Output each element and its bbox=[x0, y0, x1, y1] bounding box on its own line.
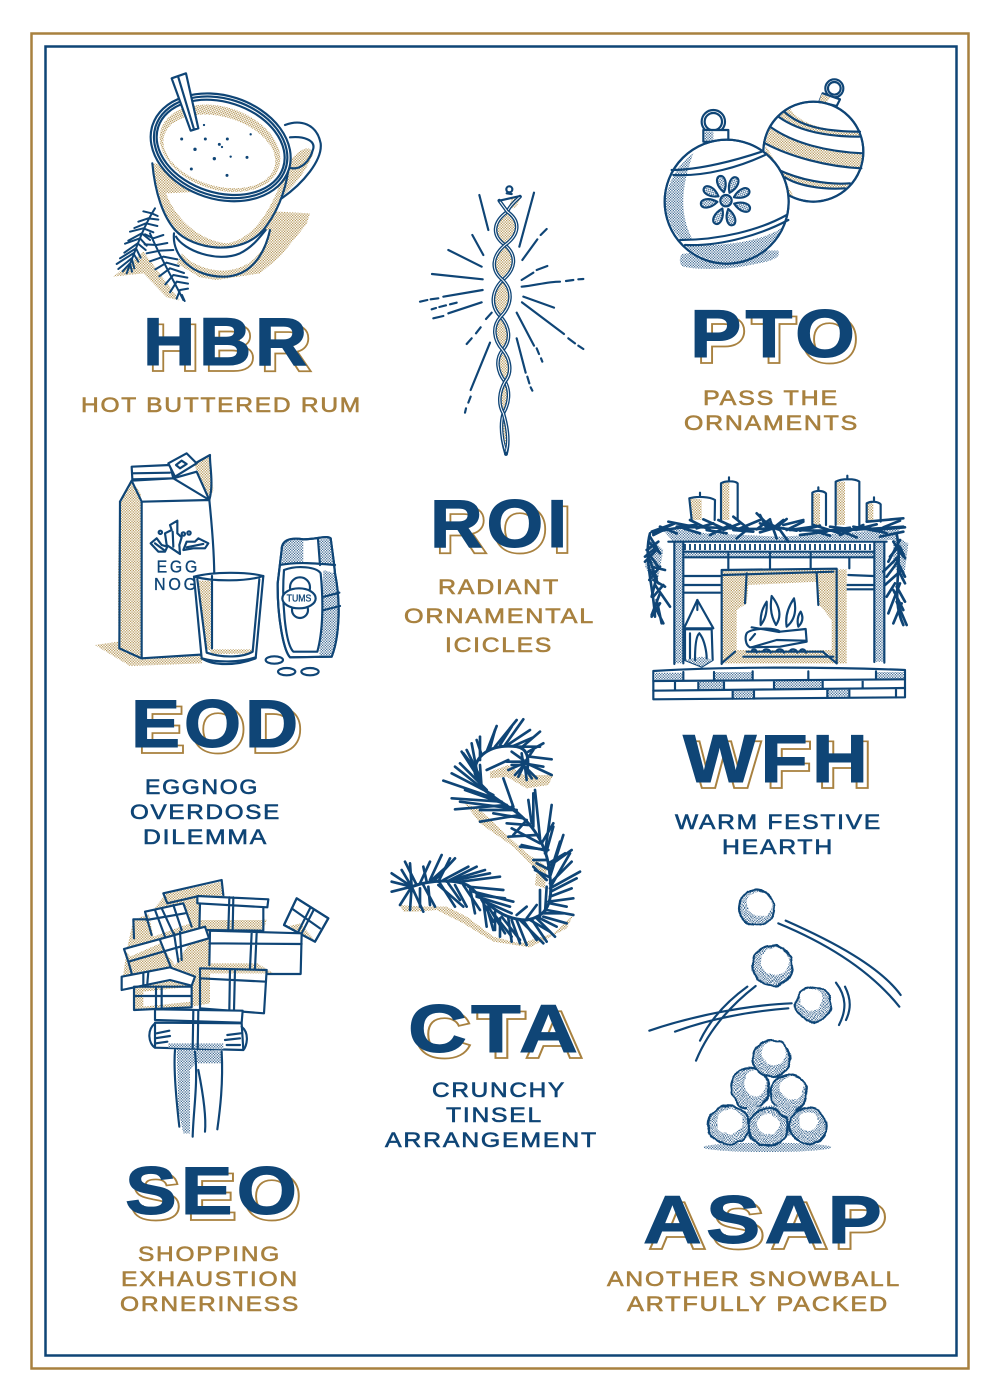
label: eggnog overdose dilemma: EGGNOG bbox=[145, 776, 259, 799]
panel: another snowball artfully packed bbox=[607, 890, 901, 1316]
heading: ASAP: ASAP bbox=[648, 1188, 892, 1264]
panel: hot buttered rum bbox=[81, 73, 362, 417]
label: crunchy tinsel arrangement: ARRANGEMENT bbox=[385, 1129, 598, 1152]
label: warm festive hearth: HEARTH bbox=[722, 836, 834, 859]
heading: EOD: EOD bbox=[137, 692, 307, 768]
heading: EOD: EOD bbox=[131, 686, 302, 762]
heading: SEO: SEO bbox=[125, 1153, 301, 1229]
holly art bbox=[151, 521, 208, 554]
label: radiant ornamental icicles: ORNAMENTAL bbox=[404, 605, 595, 628]
label: shopping exhaustion orneriness bbox=[120, 1243, 300, 1316]
icon: person carrying stacked gifts bbox=[122, 880, 328, 1137]
label: radiant ornamental icicles bbox=[404, 576, 595, 657]
label: crunchy tinsel arrangement: TINSEL bbox=[446, 1104, 543, 1127]
label: radiant ornamental icicles: RADIANT bbox=[438, 576, 560, 599]
label: pass the ornaments: PASS THE bbox=[703, 387, 839, 410]
label: pass the ornaments bbox=[684, 387, 859, 435]
label: eggnog overdose dilemma bbox=[130, 776, 281, 849]
icon: mug with sprigs bbox=[113, 73, 321, 301]
icon: eggnog carton, glass and tums: EGG bbox=[157, 556, 200, 576]
icon: flying and stacked snowballs bbox=[649, 890, 901, 1152]
icon: fireplace with garland bbox=[645, 476, 908, 699]
label: warm festive hearth: WARM FESTIVE bbox=[675, 811, 882, 834]
label: pass the ornaments: ORNAMENTS bbox=[684, 412, 859, 435]
heading: CTA: CTA bbox=[413, 997, 588, 1073]
panel: warm festive hearth bbox=[645, 476, 908, 859]
label: eggnog overdose dilemma: OVERDOSE bbox=[130, 801, 281, 824]
panel: pass the ornaments bbox=[665, 79, 863, 435]
label: hot buttered rum: HOT BUTTERED RUM bbox=[81, 394, 362, 417]
label: another snowball artfully packed: ARTFULLY PACKED bbox=[627, 1293, 889, 1316]
label: shopping exhaustion orneriness: ORNERINESS bbox=[120, 1293, 300, 1316]
heading: HBR: HBR bbox=[143, 304, 311, 380]
panel: shopping exhaustion orneriness bbox=[120, 880, 328, 1316]
heading: ASAP: ASAP bbox=[643, 1182, 886, 1258]
icon: eggnog carton, glass and tums: NOG bbox=[154, 574, 199, 594]
label: shopping exhaustion orneriness: EXHAUSTION bbox=[121, 1268, 299, 1291]
icon: twisted icicle with rays bbox=[420, 186, 583, 454]
heading: WFH: WFH bbox=[688, 727, 877, 803]
label: another snowball artfully packed: ANOTHER SNOWBALL bbox=[607, 1268, 901, 1291]
label: crunchy tinsel arrangement: CRUNCHY bbox=[432, 1079, 566, 1102]
heading: WFH: WFH bbox=[683, 721, 872, 797]
label: shopping exhaustion orneriness: SHOPPING bbox=[138, 1243, 281, 1266]
heading: SEO: SEO bbox=[130, 1159, 306, 1235]
label: another snowball artfully packed bbox=[607, 1268, 901, 1316]
heading: ROI: ROI bbox=[430, 486, 571, 562]
heading: HBR: HBR bbox=[148, 310, 316, 386]
icon: eggnog carton, glass and tums: TUMS bbox=[287, 594, 312, 605]
panel: eggnog overdose dilemma bbox=[95, 453, 340, 849]
icon: eggnog carton, glass and tums bbox=[95, 453, 340, 675]
heading: PTO: PTO bbox=[696, 302, 863, 378]
heading: ROI: ROI bbox=[435, 492, 576, 568]
label: eggnog overdose dilemma: DILEMMA bbox=[143, 826, 268, 849]
label: radiant ornamental icicles: ICICLES bbox=[445, 634, 553, 657]
panel: crunchy tinsel arrangement bbox=[385, 719, 598, 1152]
label: crunchy tinsel arrangement bbox=[385, 1079, 598, 1152]
heading: PTO: PTO bbox=[690, 296, 859, 372]
icon: tinsel garland bbox=[392, 719, 580, 947]
icon: two ornaments bbox=[665, 79, 863, 269]
panel: radiant ornamental icicles bbox=[404, 186, 595, 657]
label: warm festive hearth bbox=[675, 811, 882, 859]
heading: CTA: CTA bbox=[408, 991, 582, 1067]
